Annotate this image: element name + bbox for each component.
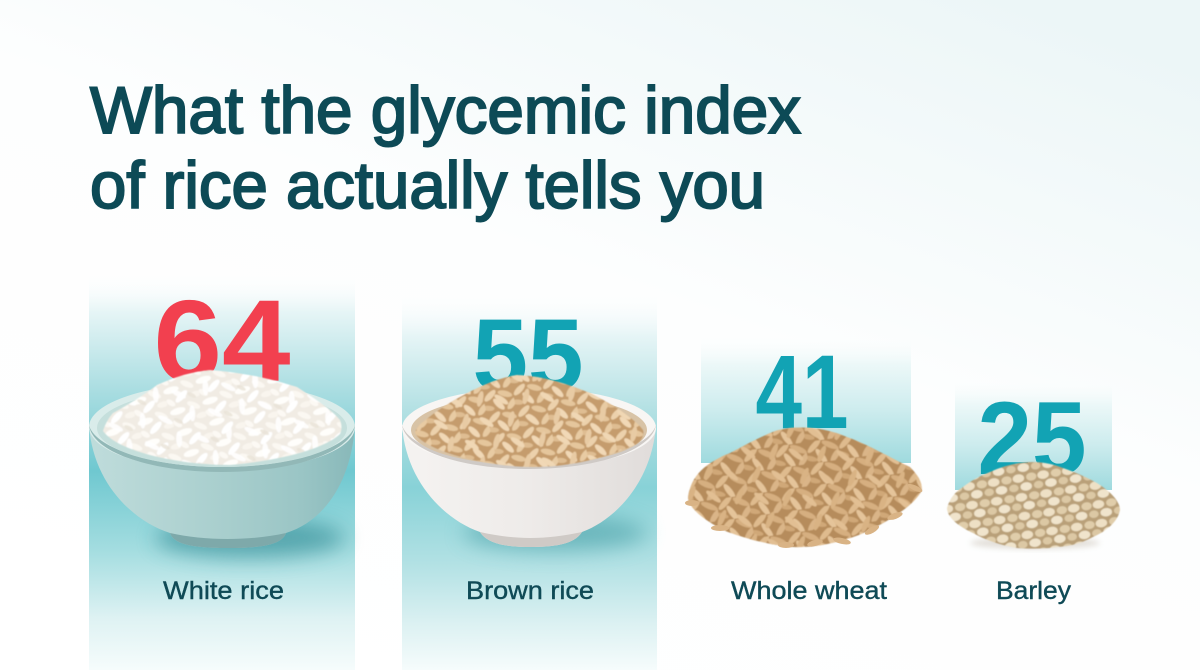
icon: whole wheat pile — [685, 420, 925, 550]
column: brown rice gradient — [402, 290, 657, 670]
panel: brown rice — [402, 290, 657, 670]
column: whole wheat gradient — [701, 332, 911, 463]
label: brown rice: Brown rice — [466, 577, 594, 605]
panel: barley — [946, 396, 1120, 604]
value: 41: 41 — [756, 334, 848, 451]
label: whole wheat: Whole wheat — [731, 577, 887, 605]
bowl shadow — [463, 515, 647, 551]
title: of rice actually tells you — [90, 148, 765, 222]
icon: barley pile — [945, 458, 1125, 554]
column: barley gradient — [955, 376, 1112, 490]
panel: white rice — [89, 272, 355, 670]
title: What the glycemic index — [90, 73, 801, 147]
icon: teal bowl of white rice — [89, 365, 355, 548]
panel: whole wheat — [685, 355, 922, 600]
bowl shadow — [155, 518, 345, 558]
column: white rice gradient — [89, 272, 355, 670]
icon: white bowl of brown rice — [402, 370, 656, 547]
label: white rice: White rice — [163, 577, 284, 605]
value: 25: 25 — [978, 381, 1086, 497]
value: 64: 64 — [154, 276, 290, 406]
label: barley: Barley — [996, 577, 1072, 605]
title — [90, 73, 801, 222]
value: 55: 55 — [472, 298, 584, 412]
